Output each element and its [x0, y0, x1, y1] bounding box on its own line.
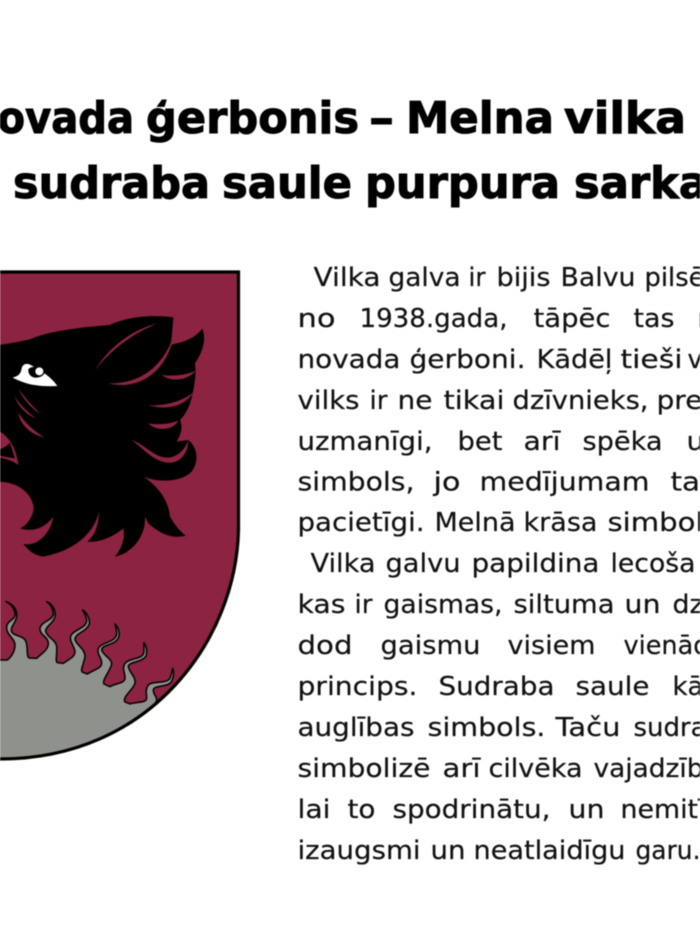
shield outline [0, 272, 238, 759]
text block: wolf head and silver sun description: jo [432, 468, 460, 498]
shield field [0, 272, 238, 759]
text block: wolf head and silver sun description: kas [298, 590, 346, 620]
title: Melna [406, 93, 554, 144]
text block: wolf head and silver sun description: spēka [582, 427, 662, 457]
wolf mouth [0, 431, 18, 465]
text block: wolf head and silver sun description: galvu [386, 549, 460, 579]
text block: wolf head and silver sun description: galva [388, 263, 460, 293]
title: vilka [564, 93, 686, 144]
title: saule [222, 158, 352, 209]
text block: wolf head and silver sun description: lai [298, 795, 330, 825]
text block: wolf head and silver sun description: novada [298, 345, 400, 375]
text block: wolf head and silver sun description: Kādēļ [536, 345, 612, 375]
text block: wolf head and silver sun description: arī [524, 427, 561, 457]
text block: wolf head and silver sun description: un [568, 795, 604, 825]
text block: wolf head and silver sun description: 1938.gada, [360, 304, 508, 334]
text block: wolf head and silver sun description: gaismas, [384, 590, 502, 620]
icon: black wolf head [0, 316, 204, 557]
text block: wolf head and silver sun description: cilvēka [488, 754, 582, 784]
text block: wolf head and silver sun description: Balvu [560, 263, 636, 293]
text block: wolf head and silver sun description: spodrinātu, [392, 795, 550, 825]
text block: wolf head and silver sun description: Vilka [310, 549, 376, 579]
text block: wolf head and silver sun description: un [624, 590, 660, 620]
text block: wolf head and silver sun description: uzmanīgi, [298, 427, 432, 457]
text block: wolf head and silver sun description: auglības [298, 713, 414, 743]
text block: wolf head and silver sun description: lecoša [610, 549, 696, 579]
title: – [369, 93, 394, 144]
text block: wolf head and silver sun description: Sudraba [438, 672, 554, 702]
icon: silver sun [0, 602, 173, 773]
text block: wolf head and silver sun description: tieši [620, 345, 682, 375]
text block: wolf head and silver sun description: vajadzīb [594, 754, 700, 784]
text block: wolf head and silver sun description: pacietīgi. [298, 508, 424, 538]
text block: wolf head and silver sun description: no [298, 304, 336, 334]
text block: wolf head and silver sun description: simbols. [428, 713, 546, 743]
wolf ear and fur cuts [14, 323, 196, 463]
text block: wolf head and silver sun description: ne [398, 386, 432, 416]
text block: wolf head and silver sun description: krāsa [524, 508, 598, 538]
text block: wolf head and silver sun description: simbol [608, 508, 700, 538]
text block: wolf head and silver sun description: princips. [298, 672, 418, 702]
text block: wolf head and silver sun description: tāpēc [534, 304, 610, 334]
text block: wolf head and silver sun description: vilks [298, 386, 360, 416]
text block: wolf head and silver sun description: visiem [508, 631, 596, 661]
text block: wolf head and silver sun description: un [430, 836, 466, 866]
text block: wolf head and silver sun description: ir [468, 263, 486, 293]
text block: wolf head and silver sun description: Melnā [434, 508, 516, 538]
text block: wolf head and silver sun description: saule [576, 672, 650, 702]
text block: wolf head and silver sun description: bijis [496, 263, 550, 293]
text block: wolf head and silver sun description: tikai [444, 386, 504, 416]
text block: wolf head and silver sun description: simbols, [298, 468, 414, 498]
title: ģerbonis [146, 93, 359, 144]
text block: wolf head and silver sun description: neatlaidīgu [474, 836, 626, 866]
wolf eye [13, 364, 57, 386]
title: sudraba [13, 158, 210, 209]
text block: wolf head and silver sun description: Taču [554, 713, 620, 743]
text block: wolf head and silver sun description: bet [458, 427, 502, 457]
text block: wolf head and silver sun description: ir [354, 590, 373, 620]
text block: wolf head and silver sun description: papildina [472, 549, 600, 579]
text block: wolf head and silver sun description: tas [634, 304, 674, 334]
text block: wolf head and silver sun description: izaugsmi [298, 836, 420, 866]
text block: wolf head and silver sun description: simbolizē [298, 754, 430, 784]
text block: wolf head and silver sun description: to [348, 795, 376, 825]
icon: coat of arms shield [0, 272, 238, 773]
text block: wolf head and silver sun description: siltuma [514, 590, 614, 620]
title [0, 93, 700, 209]
title: purpura [365, 158, 560, 209]
text block: wolf head and silver sun description: arī [442, 754, 481, 784]
text block: wolf head and silver sun description: pre [656, 386, 700, 416]
text block: wolf head and silver sun description: medījumam [480, 468, 650, 498]
text block: wolf head and silver sun description: ir [370, 386, 388, 416]
text block: wolf head and silver sun description: dod [298, 631, 352, 661]
text block: wolf head and silver sun description: gaismu [380, 631, 480, 661]
text block: wolf head and silver sun description [298, 263, 700, 866]
text block: wolf head and silver sun description: ģerboni. [410, 345, 526, 375]
text block: wolf head and silver sun description: Vilka [314, 263, 380, 293]
text block: wolf head and silver sun description: dzīvnieks, [512, 386, 648, 416]
